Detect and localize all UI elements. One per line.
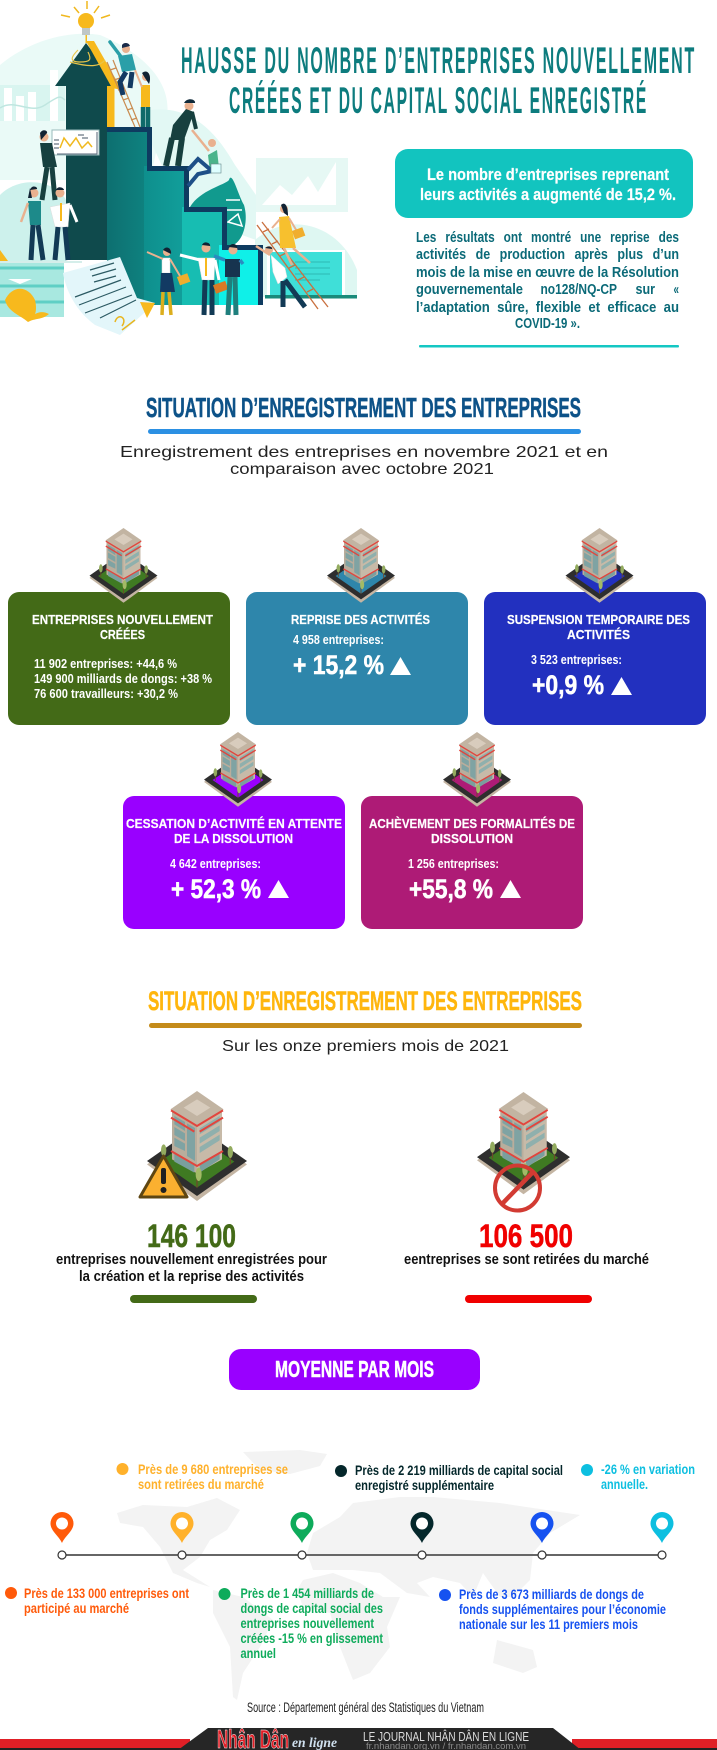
callout: reprise: leurs activités a augmenté de 15,2 %.	[420, 186, 676, 204]
card: entreprises nouvellement créées	[8, 528, 230, 725]
note: 133 000	[5, 1585, 189, 1616]
callout: reprise	[395, 149, 693, 218]
illustration background shapes	[0, 34, 357, 297]
footer band	[0, 1724, 717, 1750]
source: Source : Département général des Statistiques du Vietnam	[247, 1700, 484, 1715]
note: 1 454: créées -15 % en glissement	[240, 1630, 383, 1646]
note: 1 454: Près de 1 454 milliards de	[240, 1585, 374, 1601]
person: man with tie	[180, 242, 228, 315]
note: 3 673: nationale sur les 11 premiers mois	[459, 1616, 638, 1632]
note: 1 454	[218, 1585, 383, 1661]
card: achèvement dissolution: 1 256 entreprises:	[408, 856, 499, 871]
intro paragraph: «	[674, 282, 679, 298]
subtitle: onze mois: Sur les onze premiers mois de 2021	[222, 1038, 509, 1055]
subtitle: novembre: Enregistrement des entreprises en novembre 2021 et en	[120, 444, 608, 461]
card: suspension temporaire: SUSPENSION TEMPORAIRE DES	[507, 612, 690, 627]
card: achèvement dissolution	[361, 732, 583, 929]
card: reprise des activités: REPRISE DES ACTIVITÉS	[291, 612, 430, 627]
card: reprise des activités	[246, 528, 468, 725]
card: suspension temporaire: +0,9 %	[532, 670, 604, 700]
card: entreprises nouvellement créées: 76 600 travailleurs: +30,2 %	[34, 686, 178, 701]
light bulb	[61, 1, 110, 43]
person: climber green	[188, 130, 221, 186]
card: achèvement dissolution: +55,8 %	[409, 874, 493, 904]
pin cyan	[650, 1512, 674, 1543]
icon: building green	[89, 528, 158, 603]
subtitle: novembre: comparaison avec octobre 2021	[230, 461, 494, 478]
platform and paper	[0, 250, 82, 322]
person: woman with briefcase	[147, 247, 190, 315]
card: reprise des activités: + 15,2 %	[293, 650, 384, 680]
person: chart holder	[40, 130, 57, 200]
button: moyenne par mois: MOYENNE PAR MOIS	[275, 1356, 434, 1382]
arrow	[55, 41, 122, 260]
ladder right	[257, 222, 328, 309]
note: -26 %	[581, 1461, 695, 1492]
person: man on ladder	[256, 246, 305, 307]
world map background	[117, 1450, 580, 1700]
timeline	[50, 1512, 674, 1559]
stat: 146 100	[56, 1091, 327, 1303]
card: cessation d'activité: CESSATION D’ACTIVITÉ EN ATTENTE	[126, 816, 342, 831]
callout: reprise: Le nombre d’entreprises reprenant	[427, 166, 669, 184]
ladder top	[107, 60, 140, 127]
note: 1 454: dongs de capital social des	[240, 1600, 383, 1616]
stairs	[107, 127, 263, 305]
stat: 106 500: 106 500	[479, 1218, 573, 1254]
pin orange	[50, 1512, 74, 1543]
note: 2 219	[335, 1462, 563, 1493]
intro paragraph: gouvernementale	[416, 282, 523, 298]
card: suspension temporaire	[484, 528, 706, 725]
card: cessation d'activité: DE LA DISSOLUTION	[174, 831, 293, 846]
icon: building with warning	[140, 1091, 247, 1201]
card: suspension temporaire: 3 523 entreprises:	[531, 652, 622, 667]
stat: 146 100: 146 100	[147, 1218, 236, 1254]
person: white shirt	[50, 187, 77, 260]
heading: situation onze mois	[148, 986, 582, 1028]
document paper	[63, 257, 155, 335]
stat: 146 100: entreprises nouvellement enregistrées pour	[56, 1252, 327, 1268]
title	[181, 40, 696, 121]
person: teal shirt	[21, 186, 43, 260]
card: entreprises nouvellement créées: ENTREPRISES NOUVELLEMENT	[32, 612, 213, 627]
subtitle: novembre	[120, 444, 608, 478]
icon: building indigo	[565, 528, 634, 603]
person: climber teal	[110, 42, 136, 95]
note: 9 680: Près de 9 680 entreprises se	[138, 1461, 288, 1477]
card: reprise des activités: 4 958 entreprises:	[293, 632, 384, 647]
note: -26 %: -26 % en variation	[601, 1461, 695, 1477]
note: 9 680: sont retirées du marché	[138, 1476, 264, 1492]
card: achèvement dissolution: ACHÈVEMENT DES FORMALITÉS DE	[369, 816, 575, 831]
note: 2 219: enregistré supplémentaire	[355, 1477, 494, 1493]
intro paragraph	[416, 230, 679, 332]
person: woman yellow dress	[272, 204, 310, 265]
hero illustration	[0, 1, 357, 335]
heading: situation novembre	[146, 392, 581, 434]
icon: building purple	[204, 732, 272, 807]
person: suit on stairs	[166, 99, 196, 166]
person: woman yellow top	[135, 70, 150, 127]
card: cessation d'activité	[123, 732, 345, 929]
footer band: LE JOURNAL NHÂN DÂN EN LIGNE	[363, 1729, 529, 1744]
intro paragraph: l’adaptation sûre, flexible et efficace au	[416, 300, 679, 316]
intro paragraph: mois de la mise en œuvre de la Résolution	[416, 265, 679, 281]
intro paragraph: COVID-19 ».	[515, 315, 580, 332]
stat: 146 100: la création et la reprise des activités	[79, 1269, 304, 1285]
intro paragraph: no128/NQ-CP	[540, 282, 617, 298]
card: entreprises nouvellement créées: CRÉÉES	[100, 627, 145, 642]
card: cessation d'activité: 4 642 entreprises:	[170, 856, 261, 871]
pin blue	[530, 1512, 554, 1543]
pin green	[290, 1512, 314, 1543]
card: entreprises nouvellement créées: 149 900 milliards de dongs: +38 %	[34, 671, 212, 686]
note: 133 000: Près de 133 000 entreprises ont	[24, 1585, 189, 1601]
presentation chart	[52, 130, 99, 155]
note: 2 219: Près de 2 219 milliards de capital social	[355, 1462, 563, 1478]
intro paragraph: activités de production après plus d’un	[416, 247, 679, 263]
pin amber	[170, 1512, 194, 1543]
stat: 106 500: eentreprises se sont retirées du marché	[404, 1252, 649, 1268]
card: cessation d'activité: + 52,3 %	[171, 874, 261, 904]
stat: 106 500	[404, 1092, 649, 1303]
note: 3 673	[439, 1586, 666, 1632]
card: achèvement dissolution: DISSOLUTION	[431, 831, 513, 846]
note: 3 673: fonds supplémentaires pour l’économie	[459, 1601, 666, 1617]
intro paragraph: sur	[636, 282, 655, 298]
icon: building with prohibition	[477, 1092, 570, 1210]
note: 9 680	[116, 1461, 288, 1492]
note: 133 000: participé au marché	[24, 1600, 129, 1616]
card: entreprises nouvellement créées: 11 902 entreprises: +44,6 %	[34, 656, 177, 671]
note: 3 673: Près de 3 673 milliards de dongs de	[459, 1586, 644, 1602]
pin dark	[410, 1512, 434, 1543]
person: man on phone	[214, 244, 243, 315]
laptop	[265, 250, 357, 298]
timeline line	[62, 1554, 662, 1556]
note: -26 %: annuelle.	[601, 1476, 648, 1492]
card: suspension temporaire: ACTIVITÉS	[567, 627, 630, 642]
icon: building blue	[327, 528, 395, 603]
timeline nodes	[58, 1551, 666, 1559]
button: moyenne par mois	[229, 1349, 480, 1390]
icon: building magenta	[443, 732, 511, 807]
note: 1 454: annuel	[240, 1645, 276, 1661]
note: 1 454: entreprises nouvellement	[240, 1615, 374, 1631]
